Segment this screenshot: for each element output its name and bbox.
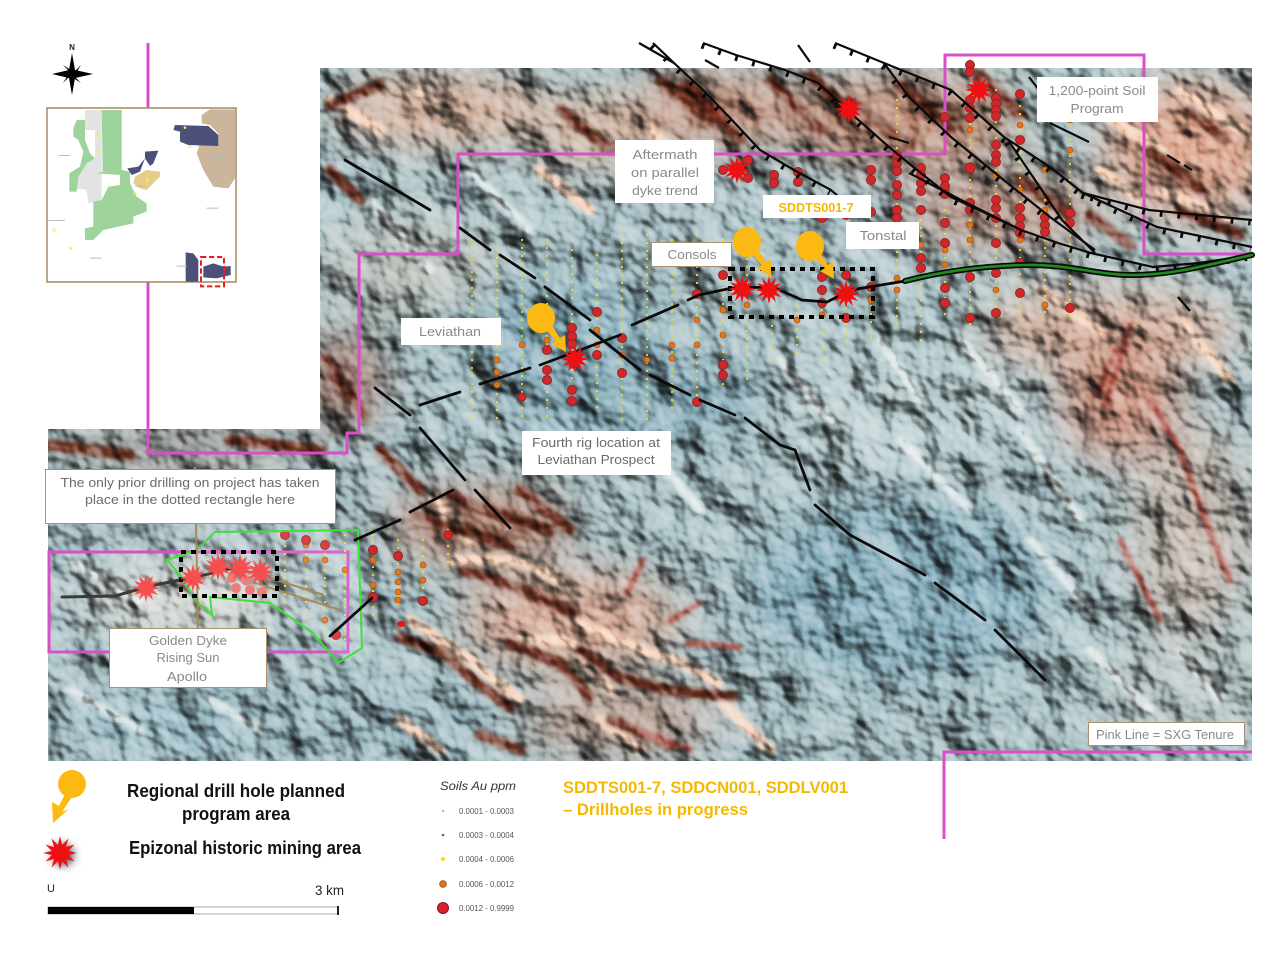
scale bar: U [47,883,55,895]
legend: regional drill hole: program area [182,804,291,824]
label: Aftermath: Aftermath [632,147,698,162]
faded stars at Golden Dyke [132,553,274,602]
drillholes in progress note [563,778,848,819]
soil sample dots: orange [303,117,1073,623]
drillholes in progress note: – Drillholes in progress [563,800,748,819]
label: Leviathan: Leviathan [419,324,481,339]
legend: epizonal mining area: Epizonal historic mining area [129,838,362,858]
label: Fourth rig: Fourth rig location at [532,435,660,450]
soil sample dots: red [280,60,1074,640]
label: Tonstal [846,222,919,249]
label: only prior drilling: The only prior drilling on project has taken [60,475,320,490]
label: Aftermath: on parallel [631,165,699,180]
label: soil program: Program [1070,101,1124,116]
legend: soils Au ppm: 0.0001 - 0.0003 [459,807,515,816]
label: pink line legend [1088,722,1244,746]
label: Consols [652,242,732,266]
label: Aftermath [615,140,714,203]
prior drilling dotted rectangles [181,269,873,596]
epizonal mining stars [561,76,993,373]
legend: soils Au ppm: Soils Au ppm [440,779,516,793]
faults with ticks [330,43,1252,680]
label: only prior drilling: place in the dotted rectangle here [85,492,295,507]
planned drill markers [527,227,834,352]
north arrow: N [69,43,75,52]
legend: soils Au ppm: 0.0006 - 0.0012 [459,880,515,889]
soil sample lines: yellow [285,60,1070,640]
drillholes in progress note: SDDTS001-7, SDDCN001, SDDLV001 [563,778,848,797]
label: Golden Dyke: Golden Dyke [149,633,227,648]
faded drill collars at Golden Dyke [227,573,267,597]
legend: regional drill hole [52,770,345,824]
scale bar [47,882,344,915]
green claim outline [167,530,362,663]
north arrow [52,43,93,95]
label: soil program: 1,200-point Soil [1048,83,1146,98]
legend: soils Au ppm: 0.0004 - 0.0006 [459,855,515,864]
label: Leviathan [401,318,501,345]
label: soil program [1037,77,1158,122]
label: Aftermath: dyke trend [632,183,698,198]
scale bar: 3 km [315,882,344,898]
label: Fourth rig [522,431,671,475]
label: only prior drilling [46,470,336,524]
legend: soils Au ppm [438,779,516,914]
label: Fourth rig: Leviathan Prospect [538,452,655,467]
label: Golden Dyke: Apollo [167,669,207,684]
legend: soils Au ppm: 0.0003 - 0.0004 [459,831,515,840]
legend: epizonal mining area [43,836,362,870]
label: SDDTS001-7: SDDTS001-7 [778,201,854,215]
inset locator map [47,108,236,286]
golden dyke dark line [62,566,240,597]
red patch [397,621,405,627]
label: SDDTS001-7 [763,195,871,218]
label: pink line legend: Pink Line = SXG Tenure [1096,727,1234,742]
label: Golden Dyke: Rising Sun [156,650,220,665]
pink tenure boundary [49,43,1252,839]
legend: regional drill hole: Regional drill hole planned [127,781,345,801]
terrain map [48,68,1274,761]
legend: soils Au ppm: 0.0012 - 0.9999 [459,904,515,913]
ridges and valleys [50,75,1240,750]
label: Consols: Consols [668,247,717,262]
golden dyke brown lines [195,467,340,630]
label: Golden Dyke [110,628,266,688]
relief shading [48,68,1252,761]
label: Tonstal: Tonstal [860,228,907,243]
green dyke trace [905,255,1252,281]
